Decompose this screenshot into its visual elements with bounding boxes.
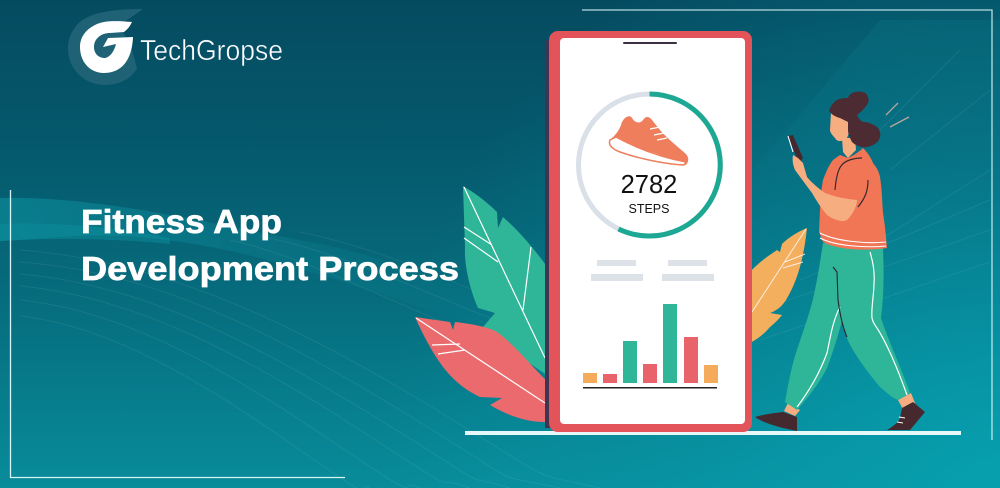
speaker — [623, 42, 677, 44]
phone screen — [560, 38, 745, 424]
trousers — [785, 243, 910, 410]
face — [830, 113, 850, 141]
neck — [842, 138, 856, 158]
sleeve folds — [835, 158, 868, 207]
logo G mark — [80, 21, 133, 73]
phone in hand — [788, 135, 803, 163]
step ring — [578, 94, 720, 236]
title: Development Process — [81, 251, 459, 288]
icon: running shoe — [609, 116, 688, 165]
shirt — [819, 148, 887, 250]
step count: 2782 — [621, 171, 677, 199]
phone body — [549, 31, 752, 432]
shoe left — [755, 412, 797, 431]
phone — [545, 31, 752, 432]
title — [81, 204, 459, 288]
leaf: green — [463, 186, 548, 376]
motion marks — [886, 103, 909, 127]
logo — [68, 9, 283, 85]
woman walking — [755, 92, 925, 431]
shoe right — [887, 402, 925, 430]
steps label: STEPS — [628, 202, 670, 216]
arm — [793, 155, 857, 221]
title: Fitness App — [81, 204, 282, 241]
bar chart — [583, 304, 718, 388]
ankles — [784, 393, 915, 416]
phone shadow edge — [545, 40, 555, 428]
hair — [829, 92, 880, 147]
leaf: orange — [750, 228, 807, 343]
leaf: red — [415, 317, 548, 422]
logo swoosh — [68, 9, 143, 85]
logo wordmark: TechGropse — [140, 35, 283, 67]
ground line — [465, 431, 961, 435]
placeholder stats — [591, 260, 714, 281]
